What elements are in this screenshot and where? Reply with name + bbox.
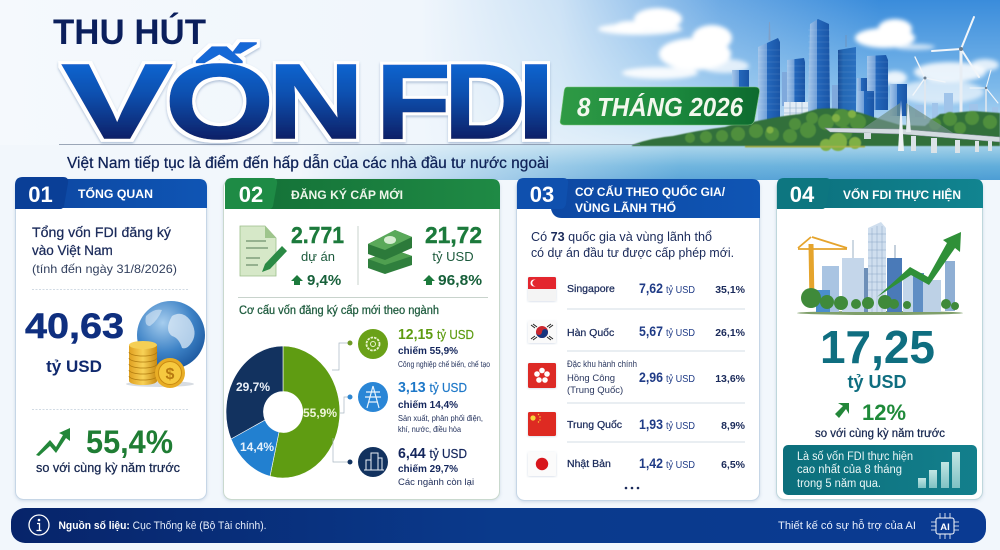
projects stat: 9,4% [307, 272, 341, 289]
sector heading: Cơ cấu vốn đăng ký cấp mới theo ngành [239, 305, 439, 317]
row: Trung Quốc [528, 412, 746, 436]
capital stat [423, 222, 482, 289]
clouds [598, 8, 999, 104]
panel 02: đăng ký cấp mới [224, 178, 500, 500]
row: Hàn Quốc: tỷ USD [666, 327, 695, 339]
icon: growth arrow [36, 428, 70, 456]
header 01 [15, 177, 207, 209]
capital stat: tỷ USD [432, 249, 474, 264]
sector: other: Các ngành còn lại [398, 477, 474, 488]
row: Hồng Công: 13,6% [715, 373, 746, 385]
title main: VỐN FDI: D [444, 43, 526, 161]
footer bar [11, 508, 986, 543]
intro text: có dự án đầu tư được cấp phép mới. [531, 245, 734, 260]
water [0, 145, 1000, 180]
sector: electricity: Sản xuất, phân phối điện, [398, 413, 483, 423]
projects stat: 2.771 [291, 222, 344, 248]
icon: cash stack [368, 230, 412, 274]
description [32, 225, 177, 276]
header 04: 04 [790, 182, 815, 207]
growth value: 55,4% [86, 424, 173, 460]
sector: manufacturing: Công nghiệp chế biến, chế tạo [398, 359, 490, 369]
header 02: 02 [239, 182, 263, 207]
title main: VỐN FDI: V [62, 43, 172, 161]
more indicator [625, 487, 639, 489]
row: Singapore: tỷ USD [666, 284, 695, 296]
icon: AI chip [931, 513, 959, 539]
callout: trong 5 năm qua. [797, 478, 881, 490]
description: (tính đến ngày 31/8/2026) [32, 262, 177, 276]
AI credit: Thiết kế có sự hỗ trợ của AI [778, 519, 916, 532]
row: Nhật Bản: tỷ USD [666, 459, 695, 471]
donut chart [226, 346, 340, 478]
header 03 [517, 178, 760, 218]
realized value: tỷ USD [847, 372, 907, 392]
icon: globe and coins: $ [166, 366, 175, 383]
sector: manufacturing: 12,15 tỷ USD [398, 326, 474, 343]
sector: electricity [348, 379, 483, 434]
total value [25, 307, 124, 376]
title main: VỐN FDI: I [517, 43, 555, 161]
row: Singapore: 7,62 [639, 281, 663, 296]
row: Hồng Công: tỷ USD [666, 373, 695, 385]
title main: VỐN FDI: F [376, 43, 450, 161]
intro text: Có 73 quốc gia và vùng lãnh thổ [531, 229, 712, 244]
growth [815, 400, 945, 440]
row: Singapore: 35,1% [715, 284, 746, 296]
date badge: 8 THÁNG 2026 [577, 92, 743, 122]
trees [632, 108, 1000, 151]
panel 04: vốn FDI thực hiện [776, 178, 983, 500]
row: Trung Quốc: tỷ USD [666, 420, 695, 432]
panel 01: tổng quan [15, 177, 207, 500]
divider line under title [59, 144, 640, 146]
row: Singapore: Singapore [567, 283, 615, 295]
header 01: TỔNG QUAN [78, 186, 153, 201]
sector: manufacturing: chiếm 55,9% [398, 345, 458, 357]
wind turbines [913, 17, 998, 118]
capital stat: 21,72 [425, 222, 482, 248]
intro text [531, 229, 734, 260]
icon: info [29, 515, 49, 535]
sector: other [348, 445, 474, 488]
row: Trung Quốc: Trung Quốc [567, 419, 622, 431]
callout [783, 445, 977, 495]
title small: THU HÚT: THU HÚT [53, 12, 206, 52]
projects stat [291, 222, 344, 289]
header 01: 01 [28, 182, 53, 207]
sector: other: 6,44 tỷ USD [398, 445, 467, 462]
donut chart: 55,9% [303, 406, 337, 420]
sector: other: chiếm 29,7% [398, 463, 458, 475]
row: Singapore [528, 277, 746, 301]
header 03: 03 [530, 182, 554, 207]
row: Nhật Bản: 1,42 [639, 456, 663, 471]
row: Hàn Quốc [528, 321, 746, 343]
sector: manufacturing [348, 326, 490, 369]
projects stat: dự án [301, 249, 335, 264]
skyline [732, 19, 998, 127]
growth: 12% [862, 400, 906, 425]
row: Hồng Công: 2,96 [639, 370, 663, 385]
row: Nhật Bản: 6,5% [721, 459, 746, 471]
row: Hàn Quốc: 5,67 [639, 324, 663, 339]
total value: 40,63 [25, 307, 124, 346]
capital stat: 96,8% [438, 272, 482, 289]
realized value: 17,25 [820, 321, 935, 373]
growth: so với cùng kỳ năm trước [815, 428, 945, 440]
icon: document and pen [240, 226, 287, 276]
callout: Là số vốn FDI thực hiện [797, 451, 913, 463]
header 03: VÙNG LÃNH THỔ [575, 200, 676, 215]
sector: electricity: chiếm 14,4% [398, 399, 458, 411]
row: Hồng Công: Hồng Công [567, 373, 615, 384]
total value: tỷ USD [46, 357, 102, 376]
sector: electricity: khí, nước, điều hòa [398, 424, 461, 434]
sector: electricity: 3,13 tỷ USD [398, 379, 467, 396]
header 02: ĐĂNG KÝ CẤP MỚI [291, 187, 403, 202]
row: Hàn Quốc: Hàn Quốc [567, 327, 614, 339]
header 03: CƠ CẤU THEO QUỐC GIA/ [575, 184, 726, 199]
row: Hồng Công [528, 359, 746, 396]
illustration: city, crane and growth arrow [797, 222, 963, 315]
row: Trung Quốc: 1,93 [639, 417, 663, 432]
row: Hồng Công: (Trung Quốc) [567, 385, 623, 396]
sky background [0, 0, 1000, 146]
icon: AI chip: AI [940, 522, 950, 533]
description: Tổng vốn FDI đăng ký [32, 225, 171, 240]
growth value [36, 424, 180, 475]
growth value: so với cùng kỳ năm trước [36, 461, 180, 475]
header 04: VỐN FDI THỰC HIỆN [843, 187, 961, 202]
header 04 [777, 178, 983, 209]
row: Hồng Công: Đặc khu hành chính [567, 359, 637, 370]
icon: globe and coins [126, 301, 205, 388]
row: Nhật Bản [528, 452, 746, 476]
bridge [825, 100, 1000, 153]
row: Trung Quốc: 8,9% [721, 420, 746, 432]
subtitle: Việt Nam tiếp tục là điểm đến hấp dẫn của các nhà đầu tư nước ngoài [67, 155, 549, 172]
header 02 [225, 178, 500, 209]
title main: VỐN FDI: Ố [165, 43, 274, 161]
panel 03: cơ cấu theo quốc gia [516, 178, 760, 500]
description: vào Việt Nam [32, 243, 113, 258]
row: Hàn Quốc: 26,1% [715, 327, 746, 339]
row: Nhật Bản: Nhật Bản [567, 458, 611, 470]
mini bar chart [918, 452, 960, 488]
donut chart: 14,4% [240, 440, 274, 454]
source: Nguồn số liệu: Cục Thống kê (Bộ Tài chính). [58, 520, 266, 532]
title main: VỐN FDI: N [268, 43, 364, 161]
donut chart: 29,7% [236, 380, 270, 394]
callout: cao nhất của 8 tháng [797, 464, 902, 476]
